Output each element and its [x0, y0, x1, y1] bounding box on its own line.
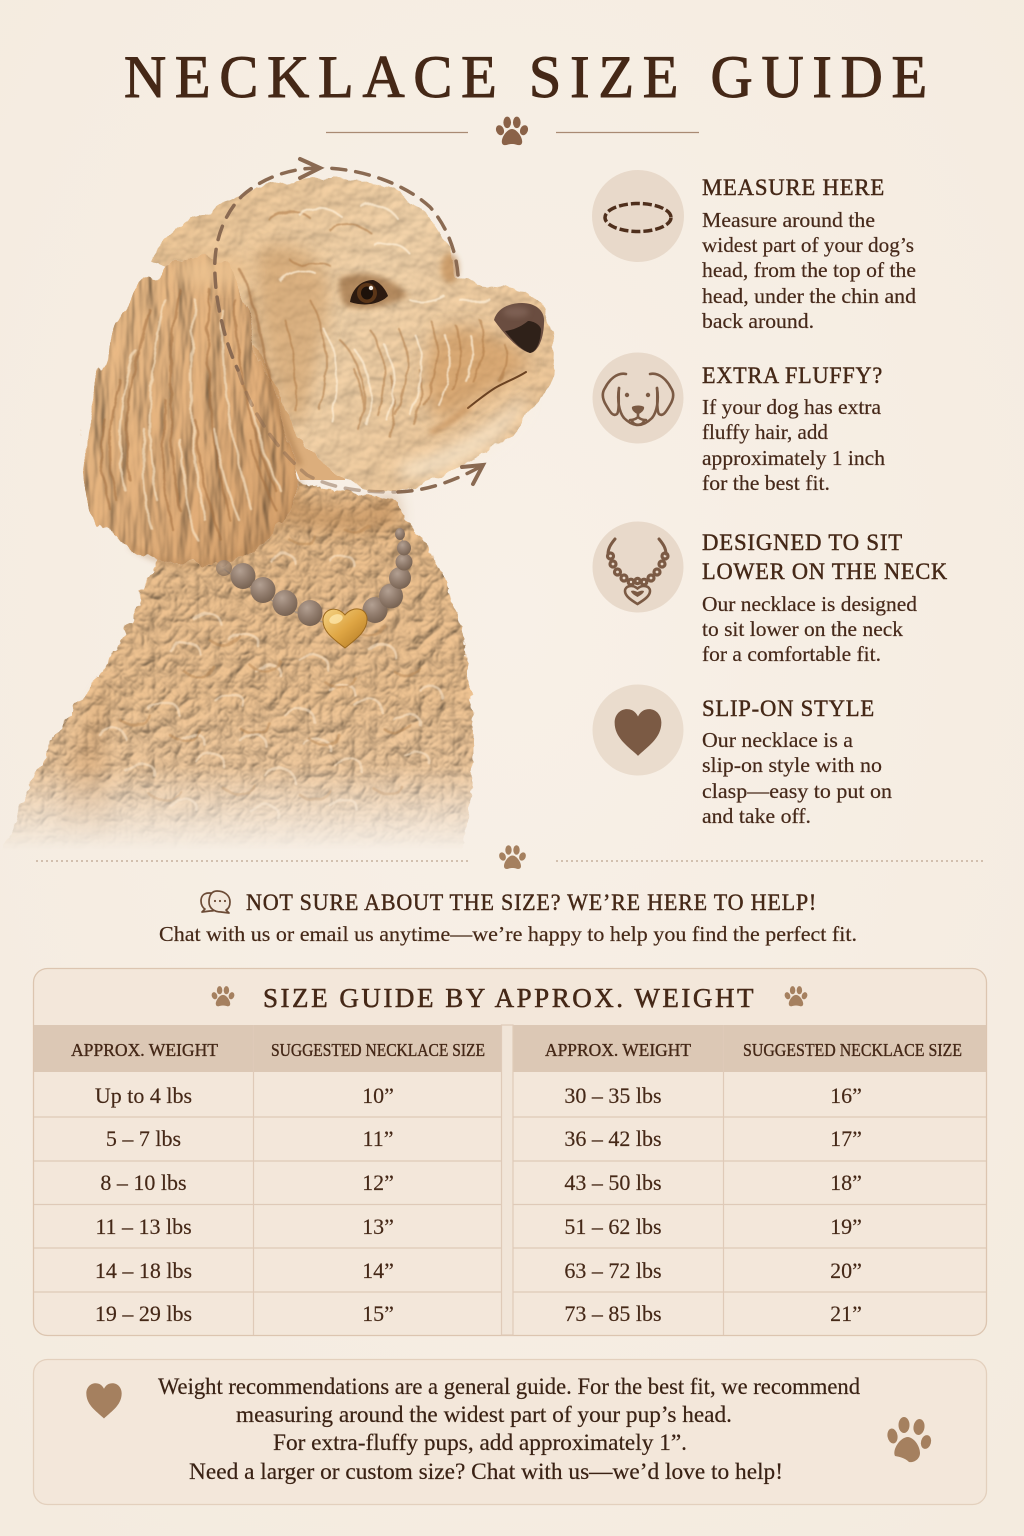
step: extra fluffy: EXTRA FLUFFY? — [702, 363, 883, 388]
step: slip-on style: SLIP-ON STYLE — [702, 696, 875, 721]
title divider with paw — [326, 117, 699, 145]
dotted divider with paw — [36, 845, 985, 869]
nose — [494, 303, 544, 353]
help message — [159, 890, 857, 946]
table rows right: 30 – 35 lbs — [564, 1083, 662, 1108]
step: designed to sit lower: for a comfortable fit. — [702, 642, 881, 666]
step: designed to sit lower — [592, 522, 948, 666]
table rows left: 14” — [362, 1258, 394, 1283]
table rows left: 12” — [362, 1170, 394, 1195]
step: extra fluffy — [592, 352, 886, 495]
table header row — [34, 1025, 986, 1072]
table title: SIZE GUIDE BY APPROX. WEIGHT — [263, 983, 756, 1013]
ear strands — [102, 270, 280, 540]
table rows left: 5 – 7 lbs — [106, 1126, 181, 1151]
table rows left: 14 – 18 lbs — [95, 1258, 192, 1283]
table rows right: 43 – 50 lbs — [564, 1170, 662, 1195]
table rows right: 36 – 42 lbs — [564, 1126, 662, 1151]
step: slip-on style: slip-on style with no — [702, 753, 882, 777]
eye — [350, 280, 388, 304]
gold heart pendant — [323, 609, 367, 648]
chin highlight — [400, 395, 526, 478]
face fur strands — [270, 204, 507, 437]
table rows right: 63 – 72 lbs — [564, 1258, 662, 1283]
step: slip-on style: and take off. — [702, 804, 811, 828]
head and ear underlay — [225, 260, 345, 480]
note text — [158, 1374, 860, 1484]
table rows left: 15” — [362, 1301, 394, 1326]
table rows right: 19” — [830, 1214, 862, 1239]
table rows left: 10” — [362, 1083, 394, 1108]
table rows left: 11” — [363, 1126, 393, 1151]
step: extra fluffy: for the best fit. — [702, 471, 830, 495]
help message: NOT SURE ABOUT THE SIZE? WE’RE HERE TO HELP! — [246, 890, 817, 915]
chest curls — [100, 526, 442, 818]
icon: chat bubbles — [201, 891, 230, 913]
step: designed to sit lower: to sit lower on the neck — [702, 617, 904, 641]
dog body — [0, 470, 471, 850]
footer note panel — [34, 1360, 986, 1504]
step: measure here: MEASURE HERE — [702, 175, 885, 200]
step: slip-on style: clasp—easy to put on — [702, 779, 893, 803]
step: designed to sit lower: DESIGNED TO SIT — [702, 530, 903, 555]
table rows left: 19 – 29 lbs — [95, 1301, 192, 1326]
table rows left — [95, 1083, 394, 1326]
step: measure here: widest part of your dog’s — [702, 233, 914, 257]
icon: dog face — [592, 352, 684, 444]
table rows left: 11 – 13 lbs — [95, 1214, 192, 1239]
illustration: dog wearing necklace — [0, 159, 555, 850]
table rows right — [564, 1083, 862, 1326]
step: measure here — [592, 170, 917, 333]
neck shadow — [275, 490, 400, 532]
table header row: SUGGESTED NECKLACE SIZE — [271, 1040, 485, 1060]
step: extra fluffy: If your dog has extra — [702, 395, 882, 419]
table header row: APPROX. WEIGHT — [545, 1040, 691, 1060]
step: measure here: back around. — [702, 309, 814, 333]
step: measure here: Measure around the — [702, 208, 875, 232]
note text: For extra-fluffy pups, add approximately 1”. — [273, 1430, 687, 1455]
note text: Weight recommendations are a general guide. For the best fit, we recommend — [158, 1374, 860, 1399]
icon: heart — [86, 1383, 122, 1419]
note text: Need a larger or custom size? Chat with us—we’d love to help! — [189, 1459, 783, 1484]
table rows right: 20” — [830, 1258, 862, 1283]
icon: dashed collar — [592, 170, 684, 262]
eye socket shadow — [339, 274, 408, 308]
muzzle shading — [427, 327, 530, 420]
icon: paw — [886, 1417, 933, 1462]
step: extra fluffy: approximately 1 inch — [702, 446, 886, 470]
brow shadow right — [441, 253, 459, 283]
table rows left: 13” — [362, 1214, 394, 1239]
step: slip-on style — [592, 684, 893, 828]
necklace — [216, 528, 412, 648]
ear — [83, 257, 300, 566]
table rows right: 73 – 85 lbs — [564, 1301, 662, 1326]
icon: heart — [592, 684, 684, 776]
ear front edge shadow — [250, 290, 300, 465]
title: NECKLACE SIZE GUIDE — [124, 44, 936, 110]
table rows right: 16” — [830, 1083, 862, 1108]
ear shadow under — [130, 480, 300, 565]
step: slip-on style: Our necklace is a — [702, 728, 854, 752]
chest shading — [67, 706, 106, 818]
note text: measuring around the widest part of your pup’s head. — [236, 1402, 732, 1427]
table header row: APPROX. WEIGHT — [71, 1040, 218, 1060]
size table panel — [34, 968, 986, 1336]
table rows left: 8 – 10 lbs — [100, 1170, 187, 1195]
step: designed to sit lower: Our necklace is designed — [702, 592, 917, 616]
cheek shading — [258, 246, 330, 430]
table rows right: 18” — [830, 1170, 862, 1195]
table rows right: 21” — [830, 1301, 862, 1326]
table grid — [34, 1025, 986, 1335]
step: measure here: head, under the chin and — [702, 284, 917, 308]
table header row: SUGGESTED NECKLACE SIZE — [743, 1040, 962, 1060]
help message: Chat with us or email us anytime—we’re happy to help you find the perfect fit. — [159, 922, 857, 946]
measuring arrow: around head — [215, 159, 483, 492]
table rows right: 51 – 62 lbs — [564, 1214, 662, 1239]
table rows left: Up to 4 lbs — [95, 1083, 192, 1108]
table rows right: 17” — [830, 1126, 862, 1151]
step: measure here: head, from the top of the — [702, 258, 916, 282]
head — [150, 178, 555, 490]
step: designed to sit lower: LOWER ON THE NECK — [702, 559, 948, 584]
ear top blend — [177, 256, 253, 288]
mouth — [432, 372, 526, 432]
icon: necklace — [592, 522, 684, 612]
step: extra fluffy: fluffy hair, add — [702, 420, 828, 444]
